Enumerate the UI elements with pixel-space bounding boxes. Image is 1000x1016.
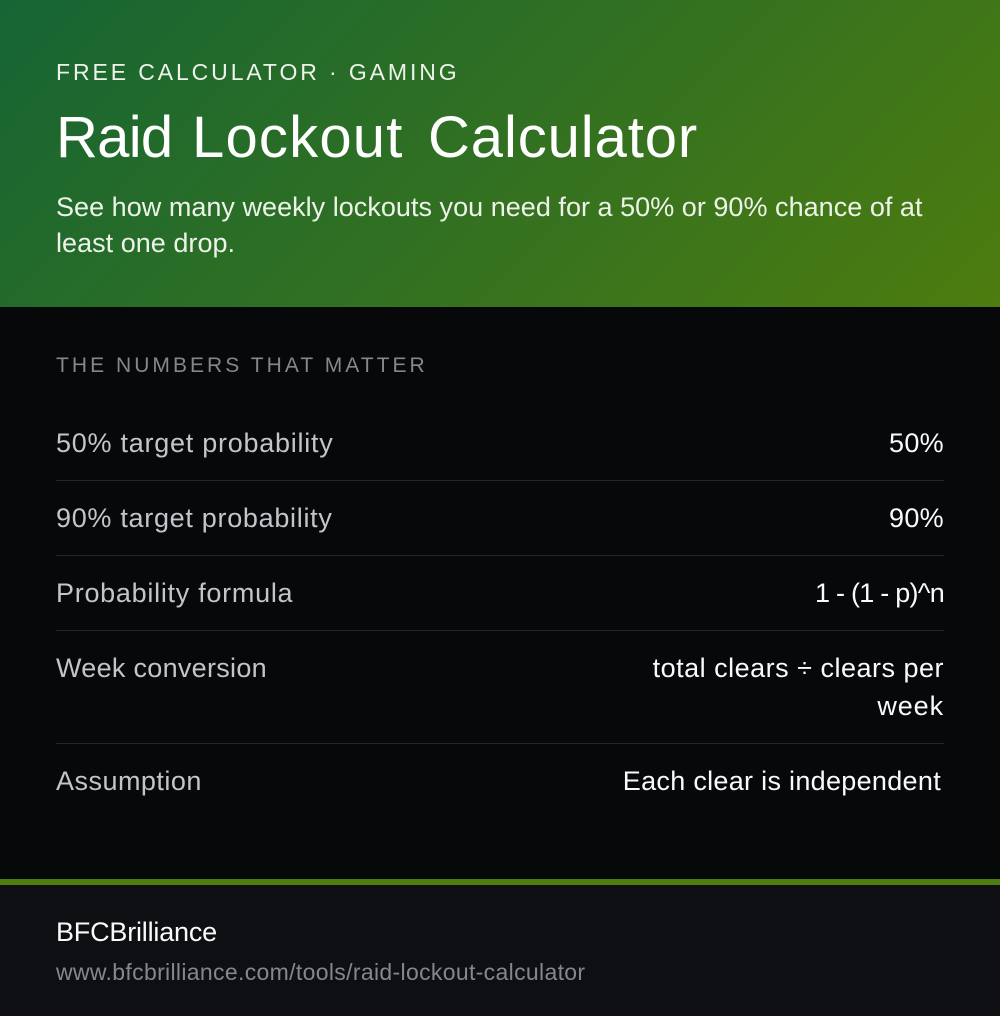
row value: 50%: 50%	[889, 428, 944, 458]
row value: total clears per week: week	[877, 691, 944, 721]
title: Calculator	[428, 105, 698, 170]
url: www.bfcbrilliance.com/tools/raid-lockout-calculator	[56, 959, 585, 985]
row label: 50% target probability: 50% target probability	[56, 428, 333, 458]
eyebrow text: FREE CALCULATOR · GAMING	[56, 59, 460, 85]
section heading: THE NUMBERS THAT MATTER	[56, 354, 428, 377]
row value: independent clears: Each clear is independent	[623, 766, 941, 796]
brand name: BFCBrilliance	[56, 917, 217, 947]
subtitle	[56, 192, 923, 258]
subtitle: least one drop.	[56, 228, 235, 258]
row label: 90% target probability: 90% target probability	[56, 503, 333, 533]
title: Raid	[56, 105, 172, 170]
row value: formula: 1 - (1 - p)^n	[815, 578, 944, 608]
header panel	[0, 0, 1000, 307]
row label: probability formula: Probability formula	[56, 578, 293, 608]
row value: total clears per week	[653, 653, 944, 721]
subtitle: See how many weekly lockouts you need for a 50% or 90% chance of at	[56, 192, 923, 222]
footer accent bar	[0, 879, 1000, 885]
row value: 90%: 90%	[889, 503, 944, 533]
row label: week conversion: Week conversion	[56, 653, 267, 683]
row value: total clears per week: total clears ÷ clears per	[653, 653, 944, 683]
title	[56, 105, 698, 170]
footer panel	[0, 879, 1000, 1016]
panel: numbers that matter	[0, 307, 1000, 879]
row label: assumption: Assumption	[56, 766, 202, 796]
title: Lockout	[192, 105, 404, 170]
